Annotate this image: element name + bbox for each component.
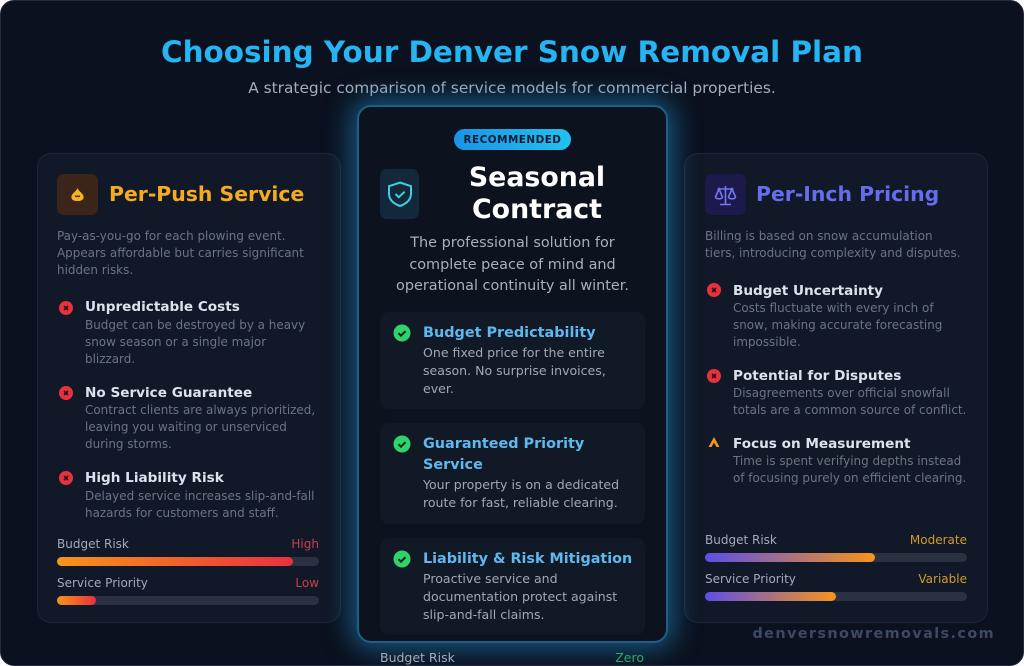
heading: per-push service: Per-Push Service: [109, 182, 304, 206]
heading: seasonal contract: Seasonal: [469, 162, 605, 193]
benefit: budget predictability: [380, 312, 645, 409]
item: unpredictable costs: [59, 299, 305, 366]
value: Moderate: [910, 533, 967, 547]
overflow value: zero: Zero: [615, 650, 644, 665]
bar: [705, 592, 967, 601]
title: Choosing Your Denver Snow Removal Plan: [161, 35, 863, 69]
label: Service Priority: [705, 572, 796, 586]
description: [396, 235, 629, 294]
benefit text: Your property is on a dedicated: [423, 477, 619, 492]
icon: check: [394, 324, 410, 342]
panel: seasonal contract: [357, 105, 668, 643]
description: [705, 229, 961, 260]
benefit text: documentation protect against: [423, 589, 617, 604]
description: Appears affordable but carries significant: [57, 246, 304, 260]
panel: per-inch pricing: [684, 153, 988, 623]
item text: snow, making accurate forecasting: [733, 318, 942, 332]
value: High: [291, 537, 319, 551]
description: Billing is based on snow accumulation: [705, 229, 933, 243]
item text: Budget can be destroyed by a heavy: [85, 318, 305, 332]
label: Service Priority: [57, 576, 148, 590]
item text: [85, 489, 314, 520]
heading: seasonal contract: [469, 162, 605, 224]
meter: service priority: [57, 576, 319, 605]
item text: Delayed service increases slip-and-fall: [85, 489, 314, 503]
item: no service guarantee: [59, 385, 315, 451]
icon: x: [707, 369, 721, 383]
item: focus on measurement: [708, 436, 966, 485]
item: budget uncertainty: [707, 283, 942, 349]
item: potential for disputes: [707, 368, 966, 417]
item text: Costs fluctuate with every inch of: [733, 301, 934, 315]
item title: Unpredictable Costs: [85, 299, 240, 315]
benefit: guaranteed priority service: [380, 423, 645, 524]
icon: x: [59, 386, 73, 400]
subtitle: A strategic comparison of service models for commercial properties.: [248, 79, 776, 97]
benefit text: Proactive service and: [423, 571, 558, 586]
benefit text: season. No surprise invoices,: [423, 363, 606, 378]
icon: shield check: [380, 169, 419, 219]
item text: blizzard.: [85, 352, 135, 366]
value: Variable: [918, 572, 967, 586]
description: [57, 229, 304, 277]
item text: [85, 318, 305, 366]
bar: [57, 557, 319, 566]
benefit text: slip-and-fall claims.: [423, 607, 545, 622]
icon: warning: [708, 437, 720, 447]
description: tiers, introducing complexity and disputes.: [705, 246, 961, 260]
watermark: denversnowremovals.com: [752, 626, 995, 642]
overflow label: budget risk: Budget Risk: [380, 650, 455, 665]
meter: service priority: [705, 572, 967, 601]
item text: totals are a common source of conflict.: [733, 403, 966, 417]
icon: money bag: [57, 174, 98, 215]
item text: [733, 386, 966, 417]
item title: Budget Uncertainty: [733, 283, 883, 299]
benefit text: One fixed price for the entire: [423, 345, 605, 360]
icon: check: [394, 436, 410, 452]
item text: [85, 403, 315, 451]
benefit title: Guaranteed Priority: [423, 436, 584, 452]
benefit text: [423, 477, 619, 510]
badge: recommended: [454, 129, 571, 150]
bar: [57, 596, 319, 605]
benefit title: Budget Predictability: [423, 325, 596, 341]
benefit title: Liability & Risk Mitigation: [423, 551, 632, 567]
benefit text: ever.: [423, 381, 454, 396]
item text: of focusing purely on efficient clearing.: [733, 471, 966, 485]
item title: Potential for Disputes: [733, 368, 901, 384]
item text: hazards for customers and staff.: [85, 506, 279, 520]
icon: check: [394, 550, 410, 568]
item text: snow season or a single major: [85, 335, 266, 349]
bar: [705, 553, 967, 562]
description: operational continuity all winter.: [396, 278, 629, 294]
label: Budget Risk: [705, 533, 777, 547]
icon: x: [59, 471, 73, 485]
description: Pay-as-you-go for each plowing event.: [57, 229, 286, 243]
heading: per-inch pricing: Per-Inch Pricing: [756, 182, 939, 206]
description: The professional solution for: [410, 235, 615, 251]
item text: leaving you waiting or unserviced: [85, 420, 287, 434]
description: complete peace of mind and: [409, 256, 616, 272]
item text: Disagreements over official snowfall: [733, 386, 950, 400]
item title: Focus on Measurement: [733, 436, 911, 452]
description: hidden risks.: [57, 263, 133, 277]
meter: budget risk: [705, 533, 967, 562]
item text: Time is spent verifying depths instead: [733, 454, 961, 468]
benefit text: route for fast, reliable clearing.: [423, 495, 618, 510]
item text: impossible.: [733, 335, 801, 349]
heading: seasonal contract: Contract: [472, 194, 602, 224]
badge: recommended: RECOMMENDED: [464, 134, 561, 146]
item title: High Liability Risk: [85, 470, 224, 486]
item text: Contract clients are always prioritized,: [85, 403, 315, 417]
icon: x: [59, 301, 73, 315]
icon: scales: [705, 174, 746, 215]
item text: [733, 301, 942, 349]
item title: No Service Guarantee: [85, 385, 252, 401]
item: high liability risk: [59, 470, 314, 520]
value: Low: [295, 576, 319, 590]
label: Budget Risk: [57, 537, 129, 551]
benefit text: [423, 571, 617, 622]
benefit text: [423, 345, 606, 396]
benefit title: Service: [423, 457, 483, 473]
item text: [733, 454, 966, 485]
benefit title: [423, 436, 584, 473]
item text: during storms.: [85, 437, 172, 451]
panel: per-push service: [37, 153, 341, 623]
icon: x: [707, 283, 721, 297]
benefit: liability and risk mitigation: [380, 538, 645, 635]
meter: budget risk: [57, 537, 319, 566]
